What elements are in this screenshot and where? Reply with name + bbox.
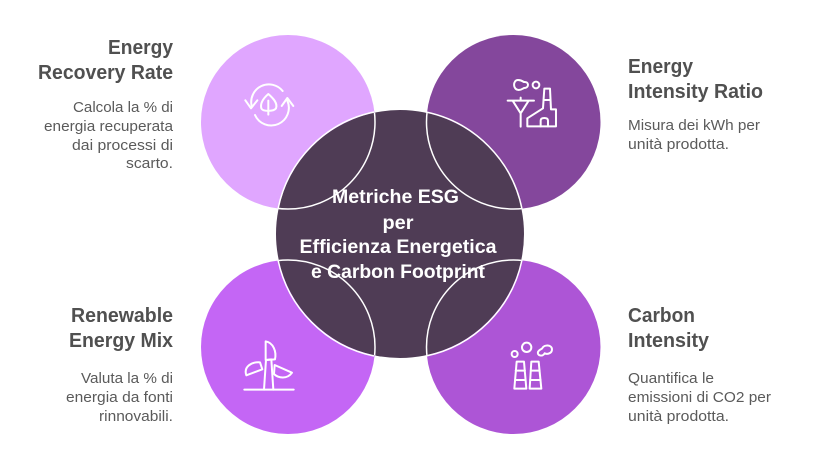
text block: renewable energy mix: Renewable (71, 305, 173, 327)
central circle (276, 110, 524, 358)
text block: carbon intensity: Carbon (628, 305, 695, 327)
icon: wind turbine (244, 341, 294, 390)
text block: energy intensity ratio: Energy (628, 56, 694, 78)
text block: energy recovery rate: scarto. (126, 156, 173, 172)
text block: energy recovery rate: Energy (108, 37, 174, 59)
icon: smokestacks (512, 343, 552, 389)
text block: energy recovery rate (38, 37, 174, 172)
central title (300, 187, 497, 283)
circle: energy intensity ratio (426, 35, 600, 209)
circle: energy recovery rate (201, 35, 375, 209)
text block: renewable energy mix: Energy Mix (69, 330, 173, 352)
central title: Efficienza Energetica (300, 237, 497, 258)
text block: energy intensity ratio: Intensity Ratio (628, 81, 763, 103)
infographic canvas (39, 35, 771, 434)
circle: carbon intensity (426, 260, 600, 434)
text block: carbon intensity: Intensity (628, 330, 710, 352)
central title: per (382, 213, 414, 234)
central circle outline arcs (278, 112, 522, 356)
text block: carbon intensity: Quantifica le (628, 371, 714, 387)
text block: carbon intensity (628, 305, 771, 425)
text block: renewable energy mix: Valuta la % di (81, 371, 173, 387)
icon: leaf recycling (245, 84, 293, 126)
text block: energy recovery rate: dai processi di (72, 138, 173, 154)
text block: renewable energy mix: rinnovabili. (99, 409, 173, 425)
circle: renewable energy mix (201, 260, 375, 434)
text block: energy intensity ratio: unità prodotta. (628, 137, 729, 153)
text block: energy intensity ratio (628, 56, 763, 153)
central title: Metriche ESG (332, 187, 459, 208)
overlap arcs (278, 112, 522, 356)
text block: renewable energy mix: energia da fonti (66, 390, 173, 406)
text block: renewable energy mix (66, 305, 173, 425)
text block: energy recovery rate: Recovery Rate (38, 62, 173, 84)
text block: carbon intensity: emissioni di CO2 per (628, 390, 771, 406)
text block: carbon intensity: unità prodotta. (628, 409, 729, 425)
text block: energy recovery rate: energia recuperata (44, 119, 174, 135)
icon: factory and pylon (508, 80, 556, 127)
text block: energy intensity ratio: Misura dei kWh per (628, 118, 760, 134)
text block: energy recovery rate: Calcola la % di (73, 100, 173, 116)
central title: e Carbon Footprint (311, 262, 486, 283)
